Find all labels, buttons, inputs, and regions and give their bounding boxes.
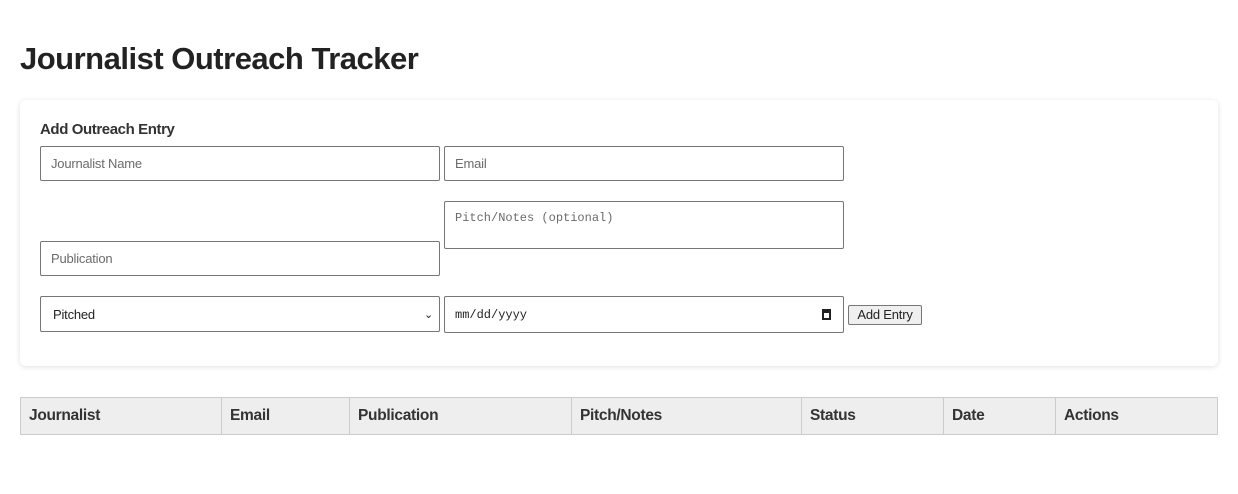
input: email [444,146,844,181]
select: status [40,296,440,332]
select: status: Pitched [53,306,95,322]
table header [20,397,1218,435]
table header: Email [230,407,270,424]
button: add entry [848,305,922,325]
table header: Journalist [29,407,100,424]
input: journalist name: Journalist Name [51,156,142,171]
select: status: ⌄ [424,308,433,320]
button: add entry: Add Entry [857,307,913,322]
input: journalist name [40,146,440,181]
input: date [444,296,844,333]
input: email: Email [455,156,487,171]
input: publication [40,241,440,276]
form heading: Add Outreach Entry [40,121,174,138]
title: Journalist Outreach Tracker [20,41,418,76]
textarea: pitch notes: Pitch/Notes (optional) [455,211,613,225]
textarea: pitch notes [444,201,844,249]
table header: Date [952,407,984,424]
panel: add entry form [20,100,1218,366]
table header: Actions [1064,407,1119,424]
input: publication: Publication [51,251,112,266]
table header: Status [810,407,856,424]
input: date: mm/dd/yyyy [455,308,527,322]
table header: Publication [358,407,438,424]
table header: Pitch/Notes [580,407,662,424]
